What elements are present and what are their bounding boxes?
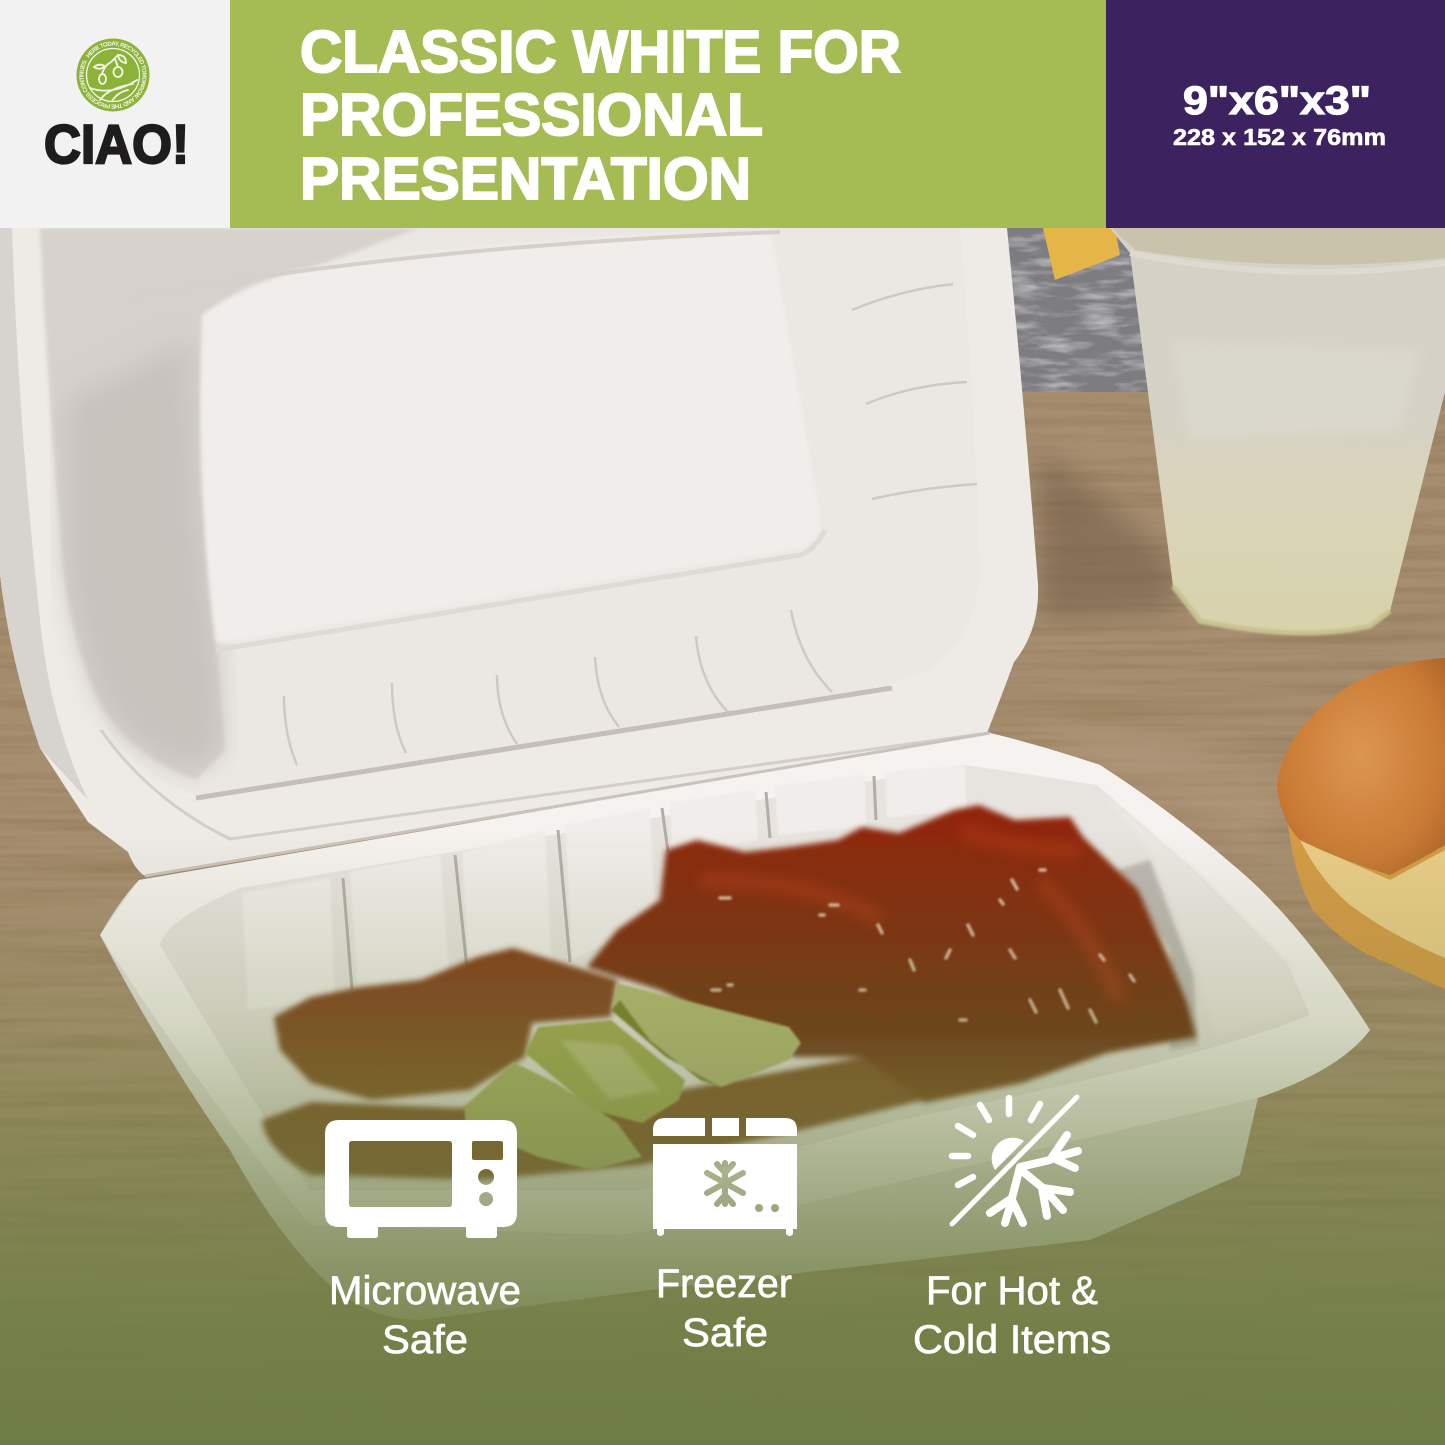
lemon slice bbox=[1043, 228, 1120, 280]
lid centre panel bbox=[201, 232, 821, 644]
base interior bbox=[160, 765, 1310, 1190]
label: For Hot & bbox=[926, 1269, 1098, 1313]
lid ridges bbox=[101, 232, 990, 876]
shadow on right inner wall bbox=[1117, 860, 1198, 1050]
feature: microwave safe bbox=[325, 1120, 521, 1362]
stone wall bbox=[1005, 228, 1150, 392]
sauce highlights bbox=[712, 870, 1134, 1022]
brand name: CIAO! bbox=[44, 113, 189, 175]
base outer wall bbox=[100, 733, 1370, 1320]
base wall panels bbox=[242, 765, 966, 1010]
heading: PRESENTATION bbox=[300, 146, 751, 212]
barbecue meat bbox=[262, 805, 1196, 1180]
label: Freezer bbox=[656, 1262, 792, 1306]
lid shadow wall bbox=[40, 228, 420, 780]
icon: sun and snowflake split by diagonal bbox=[952, 1097, 1078, 1224]
label: Cold Items bbox=[913, 1318, 1111, 1362]
title panel bbox=[230, 0, 1106, 228]
heading bbox=[300, 19, 901, 212]
table shadow beside cup bbox=[1040, 450, 1175, 620]
heading: PROFESSIONAL bbox=[300, 82, 763, 148]
base rim bbox=[100, 733, 1370, 1235]
olive wash gradient over bottom of photo bbox=[0, 830, 1445, 1445]
pickle slices bbox=[464, 983, 801, 1170]
container base bbox=[100, 733, 1370, 1320]
logo panel bbox=[0, 0, 230, 228]
label bbox=[329, 1269, 521, 1362]
lid outer shell bbox=[0, 228, 1038, 876]
lid inner tray bbox=[40, 228, 980, 796]
container lid, open bbox=[0, 228, 1038, 876]
icon: microwave bbox=[325, 1120, 517, 1238]
icon: round green olive badge: HERE TODAY, RECYCLED TOMORROW. AND THE PROCESS CONTINUES. bbox=[79, 41, 147, 109]
label: Safe bbox=[382, 1318, 468, 1362]
feature: freezer safe bbox=[653, 1118, 797, 1355]
icon: freezer bbox=[653, 1118, 797, 1236]
label bbox=[656, 1262, 792, 1355]
size panel bbox=[1106, 0, 1445, 228]
burger bun bbox=[1277, 658, 1445, 989]
clear cup with lemonade bbox=[1110, 228, 1445, 633]
feature: hot and cold items bbox=[913, 1097, 1111, 1362]
label: Safe bbox=[682, 1311, 768, 1355]
heading: CLASSIC WHITE FOR bbox=[300, 19, 901, 85]
label bbox=[913, 1269, 1111, 1362]
size in millimetres: 228 x 152 x 76mm bbox=[1173, 124, 1386, 150]
size in inches: 9"x6"x3" bbox=[1183, 79, 1371, 123]
label: Microwave bbox=[329, 1269, 521, 1313]
